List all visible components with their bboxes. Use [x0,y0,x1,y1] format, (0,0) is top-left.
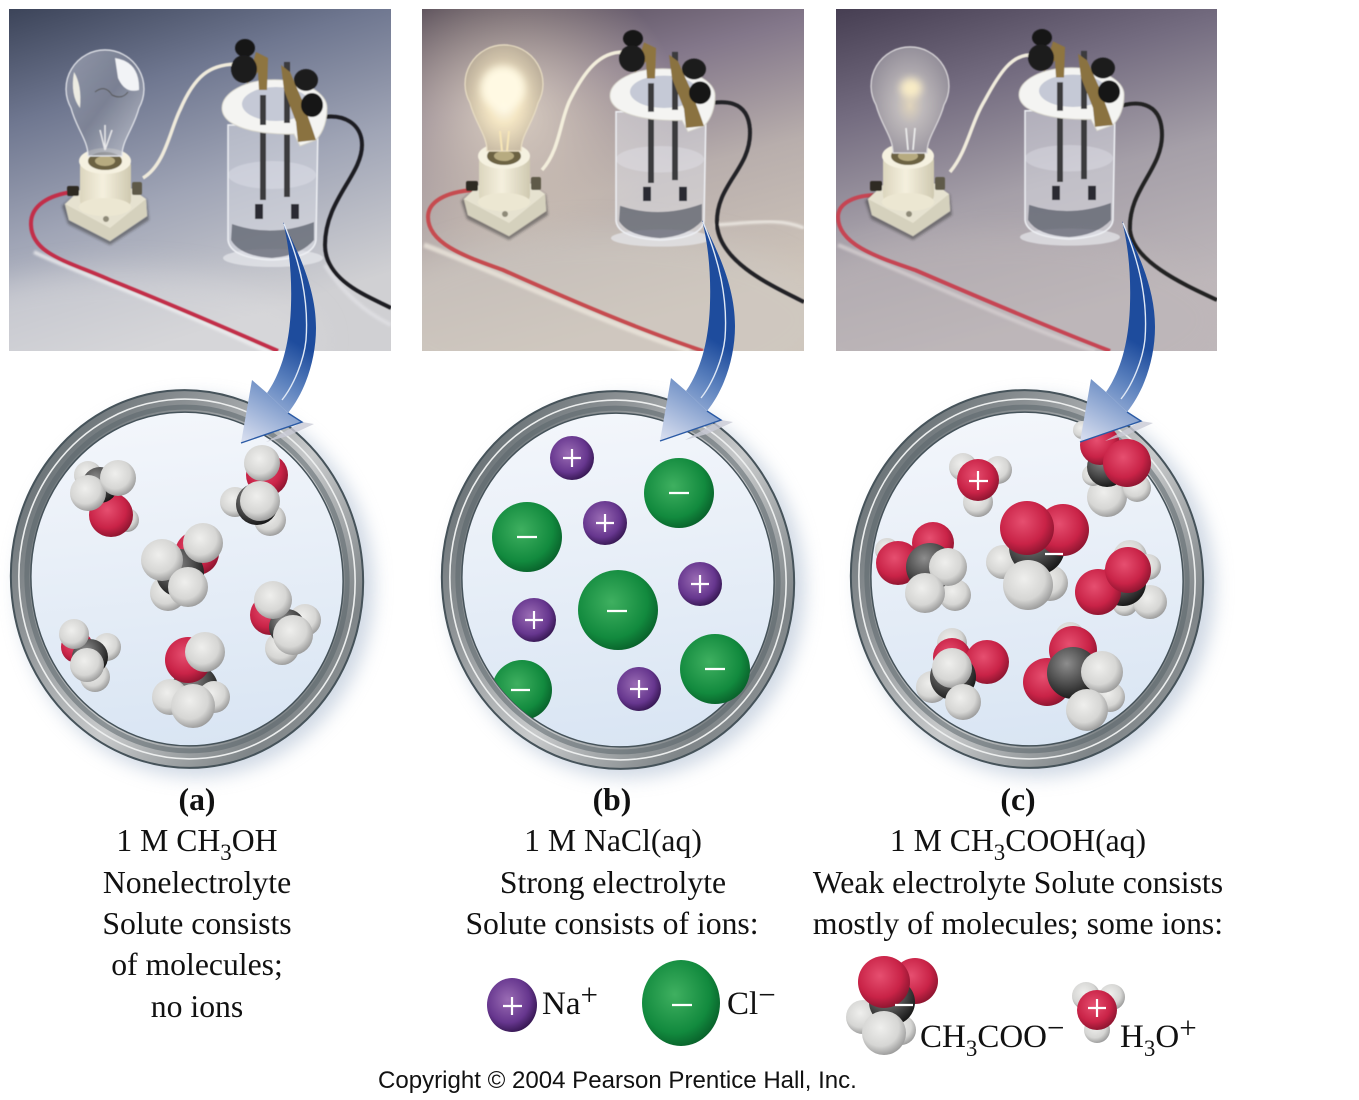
ion: Cl- 1 [492,502,562,572]
panel b: strong electrolyte [422,9,814,934]
ion: Na+ 3 [512,598,556,642]
magnified view: methanol molecules [0,373,382,785]
photo: bright bulb with salt solution [422,9,804,351]
caption b: Solute consists of ions: [465,906,759,941]
beaker with electrodes [222,39,327,267]
white wire [542,52,623,170]
caption a: OH [232,823,278,858]
legend: H3O+: + [1179,1010,1197,1045]
ion: CH3COO- [986,501,1089,610]
panel c: weak electrolyte [812,9,1224,941]
legend: H3O+: O [1155,1019,1179,1055]
molecule: CH3OH 6 [152,632,230,728]
black wire [1115,104,1217,300]
legend: CH3COO-: − [1047,1010,1065,1045]
legend: Cl- [642,960,776,1046]
caption c: Weak electrolyte Solute consists [813,865,1223,900]
ion: Na+ 2 [583,501,627,545]
caption a: Nonelectrolyte [103,865,291,900]
ion: Cl- 3 [578,570,658,650]
magnified view: acetic acid molecules and ions [832,373,1222,785]
caption b [465,782,759,941]
ion: Cl- 4 [680,634,750,704]
legend: H3O+ [1072,982,1197,1061]
caption b: 1 M NaCl(aq) [524,823,702,858]
molecule: CH3COOH left [875,522,971,613]
black wire [702,102,804,302]
legend: CH3COO-: COO [977,1019,1047,1055]
black wire [318,117,391,308]
arrow: beaker to magnified view a [241,222,316,443]
ion: H3O+ [949,453,1012,517]
molecule: CH3OH 4 [250,581,321,665]
arrow: beaker to magnified view c [1080,221,1155,442]
legend: H3O+: H [1120,1019,1144,1055]
legend: ions [487,956,1197,1061]
caption a [102,782,292,1024]
ion: Na+ 1 [550,436,594,480]
caption a: 1 M CH [116,823,220,858]
beaker with electrodes [1019,29,1124,246]
ion: Cl- 5 [492,660,552,720]
bulb lit [465,45,543,151]
bulb dim [871,47,949,153]
magnified view: sodium and chloride ions [423,374,813,786]
molecule: CH3COOH right [1075,540,1167,619]
caption a: of molecules; [111,947,283,982]
ion: Cl- 2 [644,458,714,528]
caption c [813,782,1223,941]
caption c: COOH(aq) [1005,823,1146,858]
caption a: no ions [151,989,243,1024]
ion: Na+ 4 [678,562,722,606]
socket [865,143,952,240]
caption b: Strong electrolyte [500,865,726,900]
socket [461,143,548,240]
legend: Na+: Na [542,986,580,1022]
molecule: CH3OH 5 [59,619,121,692]
legend: CH3COO-: CH [920,1019,966,1055]
molecule: CH3COOH lower right [1023,622,1125,731]
caption a: (a) [179,782,215,817]
caption c: mostly of molecules; some ions: [813,906,1223,941]
copyright: Copyright © 2004 Pearson Prentice Hall, Inc. [378,1067,857,1094]
beaker with electrodes [610,30,715,247]
caption a: 3 [220,840,232,865]
legend: CH3COO- [846,956,1065,1061]
ion: Na+ 5 [617,667,661,711]
panel a: nonelectrolyte [0,9,391,1024]
caption a: Solute consists [102,906,292,941]
legend: Cl-: Cl [727,986,758,1022]
caption c: 1 M CH [890,823,994,858]
caption c: (c) [1000,782,1036,817]
legend: H3O+: 3 [1144,1036,1155,1061]
legend: Na+ [487,977,598,1032]
legend: Na+: + [580,977,598,1012]
red wire [31,192,278,351]
red wire [838,195,1110,351]
photo: dim bulb with acetic acid solution [836,9,1217,351]
bulb unlit [66,50,144,156]
legend: CH3COO-: 3 [966,1036,977,1061]
photo: unlit bulb with methanol solution [9,9,391,351]
socket [62,148,149,245]
red wire [428,190,703,351]
molecule: CH3OH 3 [141,523,223,611]
arrow: beaker to magnified view b [660,220,735,441]
white wire [143,64,235,178]
white wire [950,55,1030,172]
molecule: CH3OH 1 [70,460,139,537]
caption c: 3 [994,840,1005,865]
molecule: CH3OH 2 [220,445,288,536]
molecule: CH3COOH lower left [916,628,1009,720]
caption b: (b) [593,782,631,817]
legend: Cl-: − [758,977,776,1012]
molecule: CH3COOH top right [1073,421,1151,517]
